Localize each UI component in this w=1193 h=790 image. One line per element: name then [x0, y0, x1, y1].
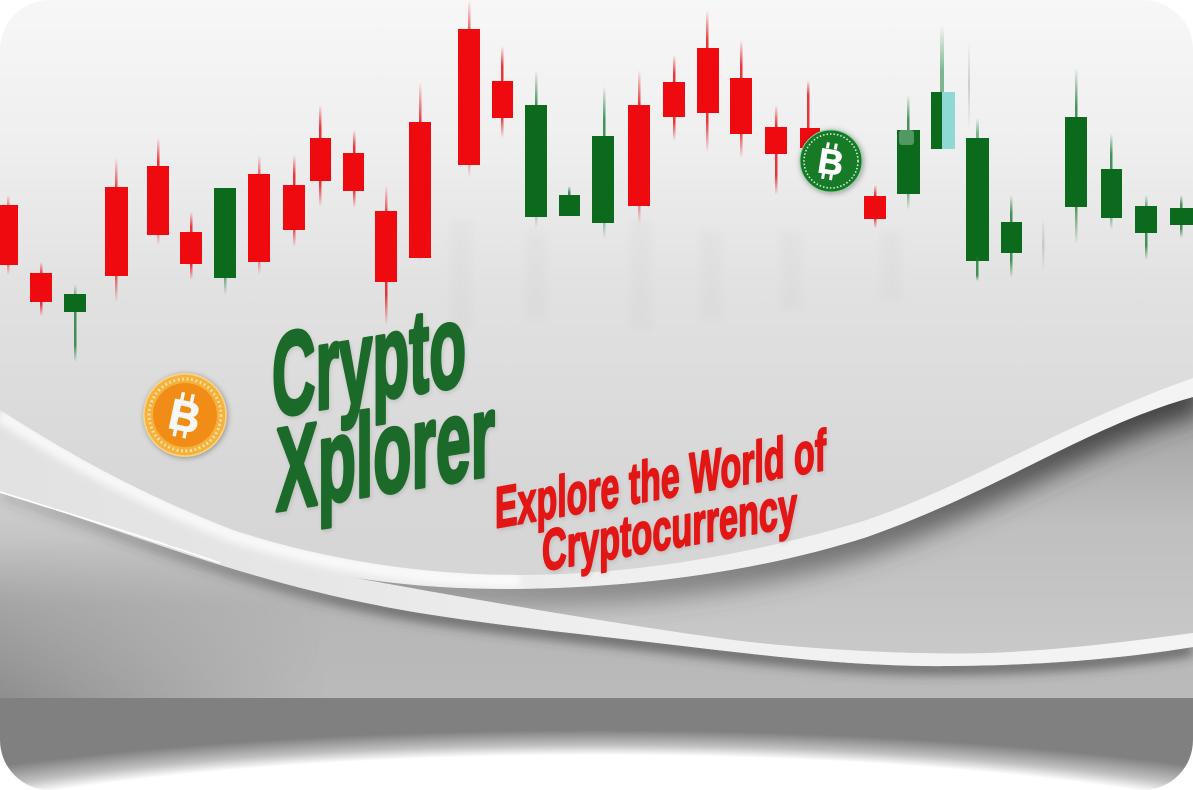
candle 2: [30, 262, 52, 316]
bottom grey band with white glow: [0, 698, 1193, 790]
candle 10: [310, 105, 331, 207]
candle 26: [897, 95, 920, 210]
candlestick chart: [0, 0, 1193, 362]
white swoosh ribbons: [0, 378, 1193, 666]
candle 28: [966, 40, 989, 281]
candle 29: [1001, 195, 1022, 278]
lower grey panel: [0, 490, 1193, 698]
title: Crypto Xplorer: [272, 278, 495, 537]
candle 18: [592, 86, 614, 239]
candle 20: [663, 55, 685, 141]
icon: green bitcoin coin: B: [815, 141, 846, 184]
candle 1: [0, 195, 18, 275]
candle 27: [931, 25, 955, 149]
ribbon shadow: [0, 494, 1193, 668]
icon: orange bitcoin coin: B: [164, 390, 205, 444]
candle 24: [800, 80, 820, 150]
candle 33: [1170, 195, 1193, 238]
candle 15: [492, 46, 513, 138]
candle 13: [409, 82, 431, 262]
candle 5: [147, 138, 169, 245]
candle 8: [248, 155, 270, 275]
candle 14: [458, 0, 480, 178]
candle 12: [375, 185, 397, 325]
candle 30: [1065, 68, 1087, 244]
candle 25: [864, 185, 886, 228]
subtitle: Explore the World of Cryptocurrency: Cryptocurrency: [542, 474, 797, 584]
candle 4: [105, 158, 128, 302]
candle 17: [559, 186, 580, 216]
title: Crypto Xplorer: Crypto: [272, 278, 466, 443]
candle 9: [283, 155, 305, 247]
candle 6: [180, 212, 202, 280]
faint wick: [1042, 225, 1044, 264]
title: Crypto Xplorer: Xplorer: [276, 368, 495, 537]
candle 11: [343, 130, 364, 208]
candle 7: [214, 188, 236, 295]
candle 23: [765, 105, 787, 195]
icon: green bitcoin coin: [800, 130, 862, 192]
candle 32: [1135, 195, 1157, 260]
candle 3: [64, 284, 86, 362]
subtitle: Explore the World of Cryptocurrency: Explore the World of: [495, 418, 826, 541]
candle 21: [697, 10, 719, 152]
candle 16: [525, 70, 547, 228]
candle 31: [1101, 133, 1122, 230]
candle 19: [628, 70, 650, 224]
candle 22: [730, 40, 752, 158]
icon: orange bitcoin coin: [144, 374, 226, 456]
right grey panel between ribbons: [350, 395, 1193, 654]
subtitle: Explore the World of Cryptocurrency: [495, 418, 826, 584]
chart reflection haze: [450, 220, 902, 330]
